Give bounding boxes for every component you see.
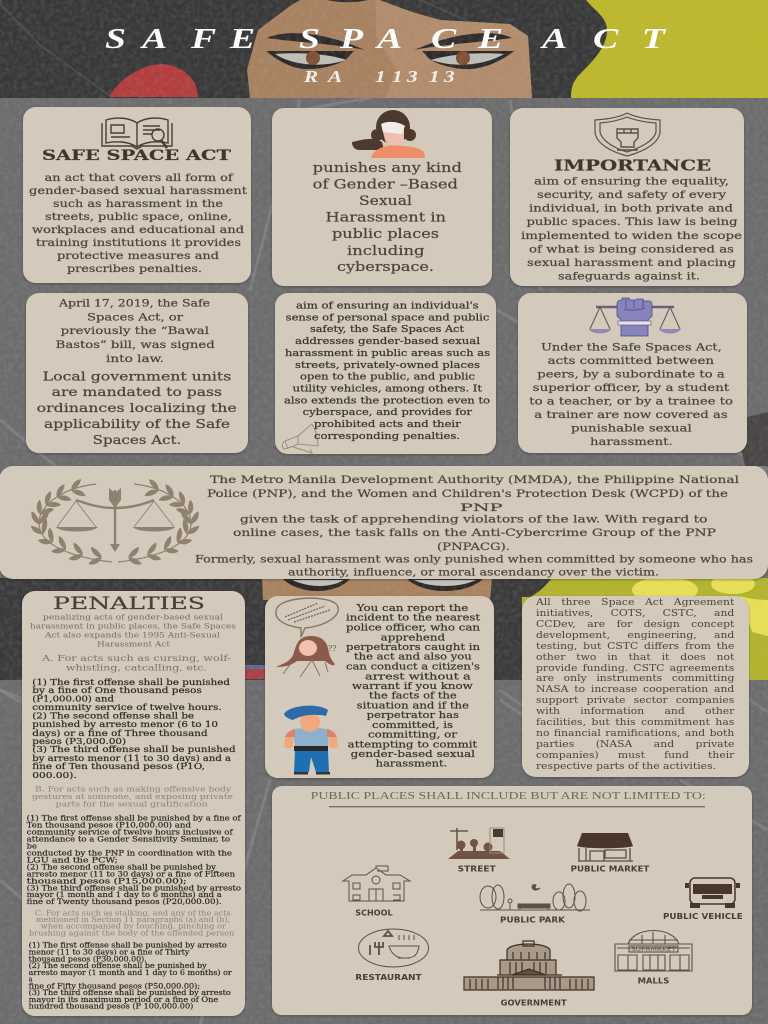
label: public vehicle: PUBLIC VEHICLE [663,912,743,921]
section C offenses: arresto mayor (1 month and 1 day to 6 months) or [29,968,232,977]
label: public park: PUBLIC PARK [500,916,566,924]
penalties intro [30,612,236,648]
label: restaurant: RESTAURANT [355,973,423,982]
icon: street [448,828,510,859]
section B heading [32,784,233,809]
section A heading [41,654,231,674]
section B offenses: be [27,842,38,851]
panel: importance: sexual harassment and placing [527,257,736,269]
icon: confused woman: ?? [328,644,337,653]
panel: enforcement banner: authority, influence, or moral ascendancy over the victim. [288,566,659,578]
panel: penalties [22,591,245,1016]
panel: how to report: situation and if the [357,700,470,711]
section C offenses: hundred thousand pesos (P 100,000.00) [29,1002,193,1011]
panel: enforcement banner: Formerly, sexual harassment was only punished when committed by someone who has [195,554,753,566]
panel: April 17: into law. [106,353,164,365]
section B offenses: (2) The second offense shall be punished by [27,862,217,871]
section B offenses: (1) The first offense shall be punished by a fine of [27,814,242,823]
panel: how to report: perpetrator has [367,710,459,721]
panel: how to report: perpetrators caught in [346,642,480,653]
heading: SAFE SPACE ACT [42,148,231,164]
section C offenses: (3) The third offense shall be punished by arresto [29,988,231,997]
panel: punishes: Sexual [359,194,412,209]
panel: April 17: are mandated to pass [52,385,222,399]
panel: how to report: the act and also you [354,652,472,663]
section A offenses: (3) The third offense shall be punished [32,744,236,755]
section A offenses: days) or a fine of Three thousand [32,728,208,739]
panel: punishes: cyberspace. [337,260,434,275]
icon: shield with fist [595,113,660,156]
section B heading: gestures at someone, and exposing private [32,792,233,801]
text block: space act agreement initiatives: no financial ramifications, and both [536,729,734,739]
icon: malls: SUPRMRKET [631,947,677,953]
eyes and brows, top [267,33,512,50]
panel: punishes: including [347,244,424,259]
panel: how to report: the facts of the [369,691,457,702]
panel: how to report: You can report the [355,603,469,614]
section B offenses: (3) The third offense shall be punished by arresto [27,883,242,892]
penalties intro: penalizing acts of gender-based sexual [43,612,224,622]
section A offenses: punished by arresto menor (6 to 10 [32,719,218,730]
section C offenses: fine of Fifty thousand pesos (P50,000.00); [29,981,200,990]
text block: space act agreement initiatives: testing, but CSTC differs from the [536,642,734,652]
panel: safe space act: protective measures and [57,251,220,262]
icon: restaurant [358,929,428,967]
section A offenses: fine of Ten thousand pesos (P1O, [32,761,205,772]
panel: personal space [275,293,496,454]
section B offenses: mayor (1 month and 1 day to 6 months) and a [27,890,222,899]
panel: punishes: public places [332,227,439,242]
section C offenses: thousand pesos (P30,000.00). [29,954,147,963]
section A offenses: (P1,000.00) and [32,694,115,704]
section B offenses: thousand pesos (P15,000.00); [27,876,187,885]
section C offenses: menor (11 to 30 days) or a fine of Thirty [29,948,190,957]
panel: safe space act: prescribes penalties. [67,264,202,275]
panel: punishes: Harassment in [326,210,447,226]
section A offenses: pesos (P3,000.00) [32,736,126,747]
section A offenses: by arresto menor (11 to 30 days) and a [32,753,231,764]
text block: space act agreement initiatives: facilities, but this commitment has [536,718,734,728]
panel: under the act: punishable sexual [571,422,692,434]
panel: enforcement banner: (PNPACG). [437,541,510,553]
heading: PENALTIES [53,594,205,614]
subtitle: RA 11313 [303,68,455,86]
section B offenses: attendance to a Gender Sensitivity Seminar, to [27,835,231,844]
panel: April 17: ordinances localizing the [37,401,237,415]
panel: safe space act: an act that covers all form of [45,173,234,184]
text block: space act agreement initiatives: All three Space Act Agreement [536,598,734,608]
section C offenses: mayor in its maximum period or a fine of One [29,995,218,1004]
panel: enforcement banner: given the task of apprehending violators of the law. With regard to [240,514,708,526]
panel: under the act: superior officer, by a student [533,382,730,394]
panel: safe space act: streets, public space, online, [45,212,232,223]
section A offenses [32,677,236,781]
section A offenses: community service of twelve hours. [32,703,222,713]
panel: punishes [272,108,492,286]
panel: importance: aim of ensuring the equality, [534,176,729,188]
icon: public market [577,833,633,861]
panel: how to report: can conduct a citizen's [346,662,480,673]
section C heading: brushing against the body of the offended person [29,929,235,937]
text block: space act agreement initiatives: development, engineering, and [536,631,734,641]
icon: malls [615,930,692,971]
section C offenses: (2) The second offense shall be punished by [29,961,208,970]
panel: safe space act: such as harassment in the [53,199,223,210]
icon: police officer [284,706,338,774]
section B offenses: fine of Twenty thousand pesos (P20,000.00). [27,897,222,906]
panel: how to report: police officer, who can [346,622,480,633]
text block: space act agreement initiatives: are only instruments committing [536,674,734,684]
panel: how to report [265,596,494,778]
panel: safe space act [23,107,251,283]
panel: how to report: gender-based sexual [351,749,475,760]
icon: public vehicle [685,878,740,908]
panel: personal space: streets, privately-owned places [295,361,481,371]
icon: megaphone [282,424,318,453]
panel: personal space: harassment in public areas such as [285,349,491,359]
label: school: SCHOOL [355,908,393,918]
panel: safe space act: training institutions it provides [36,238,241,249]
panel: public places [272,786,752,1015]
panel: importance: safeguards against it. [558,270,700,282]
section A offenses: (2) The second offense shall be [32,710,194,722]
top band [0,0,768,98]
panel: personal space: open to the public, and public [300,372,475,382]
panel: personal space: safety, the Safe Spaces Act [310,325,465,335]
icon: book with magnifier [102,118,172,149]
text block: space act agreement initiatives: initiatives, COTS, CSTC, and [536,609,734,619]
section C heading: C. For acts such as stalking, and any of the acts [35,910,231,918]
section A heading: whistling, catcalling, etc. [66,664,207,674]
panel: enforcement banner: online cases, the task falls on the Anti-Cybercrime Group of the PNP [233,527,716,539]
panel: April 17: previously the “Bawal [61,325,210,337]
panel: how to report: harassment. [376,759,447,770]
panel: space act agreement card [522,596,749,777]
icon: scales in laurel wreath [29,477,201,567]
section B heading: B. For acts such as making offensive body [35,784,232,793]
text block: space act agreement initiatives: provide funding. CSTC agreements [536,664,734,674]
panel: April 17: Local government units [43,370,231,384]
panel: importance: security, and safety of every [537,189,726,201]
label: public market: PUBLIC MARKET [571,865,650,874]
panel: enforcement banner: PNP [460,502,502,514]
heading: PUBLIC PLACES SHALL INCLUDE BUT ARE NOT LIMITED TO: [311,791,706,802]
text block: space act agreement initiatives: CCDev, are for design concept [536,620,734,630]
text block: space act agreement initiatives: NASA to increase cooperation and [536,685,734,695]
text block: space act agreement initiatives: with information and other [536,707,734,717]
title: SAFE SPACE ACT [105,23,667,55]
panel: April 17: Bastos” bill, was signed [56,339,215,351]
panel: personal space: cyberspace, and provides for [303,408,473,418]
panel: personal space: utility vehicles, among others. It [293,384,483,394]
panel: under the act: Under the Safe Spaces Act, [541,342,722,354]
panel: personal space: prohibited acts and their [314,420,462,430]
section B offenses: arresto menor (11 to 30 days) or a fine of Fifteen [27,869,235,878]
panel: personal space: sense of personal space and public [286,314,489,324]
panel: importance: implemented to widen the scope [521,230,742,242]
label: malls: MALLS [638,977,669,986]
panel: how to report: incident to the nearest [346,613,480,624]
panel: personal space: also extends the protection even to [284,396,490,406]
panel: how to report: arrest without a [365,671,471,682]
section A heading: A. For acts such as cursing, wolf- [41,654,231,664]
text block: space act agreement initiatives: parties (NASA and private [536,740,734,750]
section B offenses [27,814,242,906]
panel: enforcement banner: Police (PNP), and the Women and Children's Protection Desk (WCPD) of the [207,488,728,500]
label: government: GOVERNMENT [501,999,568,1008]
icon: public park [480,884,590,911]
penalties intro: Act also expands the 1995 Anti-Sexual [44,630,221,640]
panel: how to report: warrant if you know [352,681,473,692]
panel: how to report: apprehend [381,632,445,643]
section B heading: parts for the sexual gratification [56,800,208,809]
panel: importance: of what is being considered as [529,244,734,256]
panel: under the act: to a teacher, or by a trainee to [529,396,733,408]
panel: under the act: peers, by a subordinate to a [537,368,725,380]
panel: safe space act: workplaces and educational and [32,225,245,236]
text block: space act agreement initiatives [536,598,734,772]
label: street: STREET [458,864,497,874]
section B offenses: LGU and the PCW; [27,855,118,864]
section A offenses: by a fine of One thousand pesos [32,686,202,696]
text block: space act agreement initiatives: support private sector companies [536,696,734,706]
icon: school [343,866,410,901]
panel: April 17: April 17, 2019, the Safe [58,298,210,310]
icon: fist and scales [589,298,681,336]
panel: punishes: of Gender –Based [313,178,458,192]
section C heading: mentioned in Section 11 paragraphs (a) and (b), [36,916,230,924]
panel: under the act: a trainer are now covered as [534,409,728,421]
penalties intro: Harassment Act [97,640,171,648]
section A offenses: (1) The first offense shall be punished [32,677,231,688]
text block: space act agreement initiatives: other two in that it does not [536,653,734,663]
panel: under the act [518,293,747,453]
panel: punishes: punishes any kind [313,161,462,176]
panel: enforcement banner: The Metro Manila Development Authority (MMDA), the Philippine National [210,474,740,486]
panel: April 17: applicability of the Safe [44,417,230,431]
panel: how to report: committed, is [372,720,453,731]
section A offenses: 000.00). [32,770,77,781]
icon: confused woman [276,636,337,677]
icon: blindfolded woman [352,110,425,158]
text block: space act agreement initiatives: respective parts of the activities. [536,762,716,772]
repeated photo band below banner [0,578,768,680]
panel: importance [510,108,744,286]
heading: IMPORTANCE [554,156,711,174]
section B offenses: community service of twelve hours inclusive of [27,828,234,837]
section C offenses: a [29,975,33,984]
text block: space act agreement initiatives: companies) must fund their [536,751,734,761]
panel: under the act: harassment. [590,436,673,448]
section C offenses [29,941,232,1011]
section B offenses: conducted by the PNP in coordination with the [27,848,233,857]
panel: safe space act: gender-based sexual harassment [29,186,247,197]
panel: April 17 [26,293,248,453]
panel: personal space: aim of ensuring an individual's [296,302,479,312]
panel: enforcement banner [0,466,768,579]
panel: personal space: corresponding penalties. [314,432,460,442]
panel: personal space: addresses gender-based sexual [295,337,480,347]
panel: April 17: Spaces Act. [93,433,181,447]
panel: how to report: committing, or [368,730,458,741]
panel: importance: public spaces. This law is being [526,216,738,228]
section C heading: when accompanied by touching, pinching or [41,923,227,931]
panel: April 17: Spaces Act, or [87,312,184,324]
section B offenses: Ten thousand pesos (P10,000.00) and [27,821,191,830]
panel: under the act: acts committed between [548,355,714,367]
section C heading [29,910,235,937]
panel: how to report: attempting to commit [348,739,478,750]
icon: speech bubble [276,598,338,637]
panel: importance: individual, in both private and [529,202,733,214]
icon: government [464,941,594,990]
penalties intro: harassment in public places, the Safe Spaces [30,622,236,630]
section C offenses: (1) The first offense shall be punished by arresto [29,941,227,950]
